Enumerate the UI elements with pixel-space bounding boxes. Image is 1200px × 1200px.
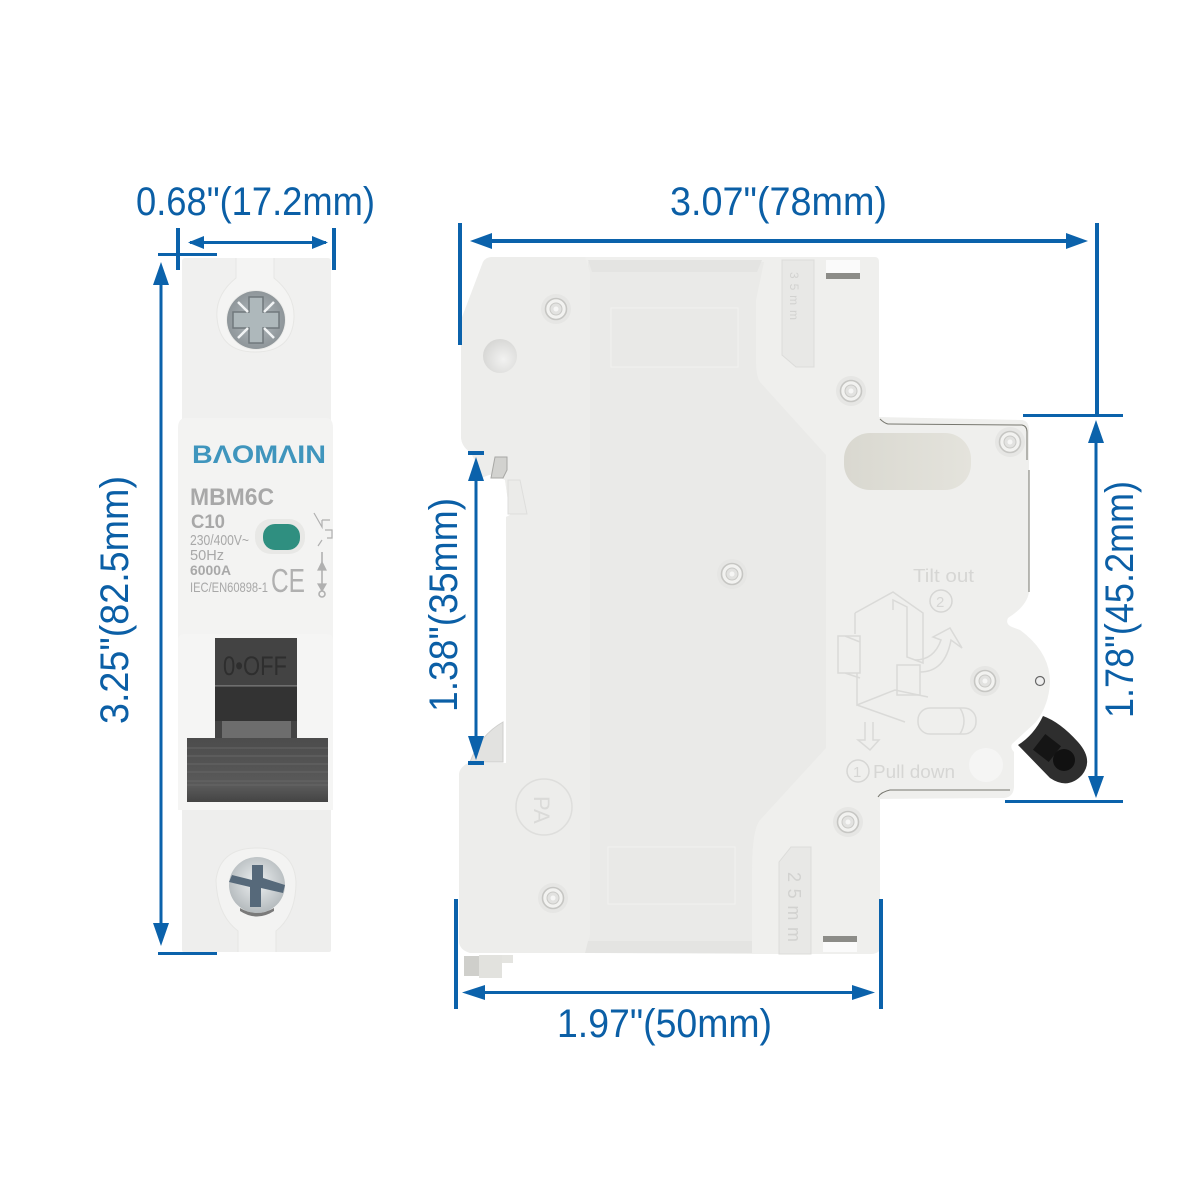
small pin	[1036, 676, 1044, 686]
dimension: height 1.78 in	[1005, 414, 1142, 803]
bottom slider: 25mm	[784, 872, 804, 942]
dimension: length 3.07 in: 3.07"(78mm)	[670, 180, 887, 224]
pull down instruction: Pull down	[873, 762, 955, 782]
black lever side	[1018, 716, 1087, 783]
top slider: 35mm	[787, 272, 801, 320]
label recess bottom	[608, 847, 735, 904]
rivets	[538, 294, 1025, 913]
tilt out instruction: Tilt out	[913, 566, 974, 586]
dimension: rail 1.38 in: 1.38"(35mm)	[422, 498, 466, 712]
label recess top	[611, 308, 738, 367]
bottom screw	[216, 848, 296, 952]
dark lever	[215, 638, 297, 739]
side body outline	[459, 257, 1050, 954]
edge shadow lines	[878, 419, 1029, 797]
CE mark: CE	[271, 562, 305, 599]
foot clip	[464, 955, 513, 978]
dark lever: 0•OFF	[223, 651, 287, 681]
dimension: width 1.97 in: 1.97"(50mm)	[557, 1002, 772, 1046]
brand logo: BΛOMΛIN	[192, 441, 326, 469]
model text: 50Hz	[190, 547, 224, 564]
circuit symbol	[314, 513, 332, 597]
dimension: width 0.68 in	[136, 180, 375, 270]
dimension: height 1.78 in: 1.78"(45.2mm)	[1098, 481, 1142, 718]
top and bottom shade strips	[588, 260, 762, 272]
tilt out instruction	[913, 566, 974, 612]
dimension: height 3.25 in	[93, 253, 217, 955]
front view breaker	[178, 258, 333, 952]
centre panel	[588, 258, 826, 953]
model text: 6000A	[190, 562, 231, 578]
side view breaker	[459, 257, 1087, 978]
front label panel	[178, 418, 333, 810]
dimension: rail 1.38 in	[422, 451, 484, 765]
front body top section	[182, 258, 331, 428]
grey window	[844, 433, 971, 490]
PA stamp: PA	[529, 796, 554, 824]
dimension: width 0.68 in: 0.68"(17.2mm)	[136, 180, 375, 224]
switch housing	[178, 634, 333, 810]
model text: MBM6C	[190, 484, 274, 511]
model text: 230/400V~	[190, 532, 249, 549]
mounting holes	[483, 339, 1003, 782]
model text: IEC/EN60898-1	[190, 579, 268, 595]
pull down instruction: 1	[853, 764, 861, 781]
dimension: width 1.97 in	[454, 899, 883, 1046]
model text: C10	[191, 511, 225, 533]
top slider	[782, 260, 860, 367]
left section	[459, 257, 590, 953]
bottom slider	[779, 847, 857, 954]
green indicator window	[255, 519, 305, 554]
tilt out instruction: 2	[936, 594, 944, 611]
model text	[190, 484, 274, 595]
pull down instruction	[847, 760, 955, 782]
dimension: height 3.25 in: 3.25"(82.5mm)	[93, 476, 137, 724]
rail clip bottom	[470, 722, 503, 762]
lever grip	[187, 738, 328, 802]
PA stamp	[516, 779, 572, 835]
dimension: length 3.07 in	[458, 180, 1099, 416]
removal diagram	[838, 592, 976, 750]
top screw	[217, 258, 294, 352]
rail clip top	[491, 457, 527, 514]
front body bottom section	[182, 805, 331, 952]
